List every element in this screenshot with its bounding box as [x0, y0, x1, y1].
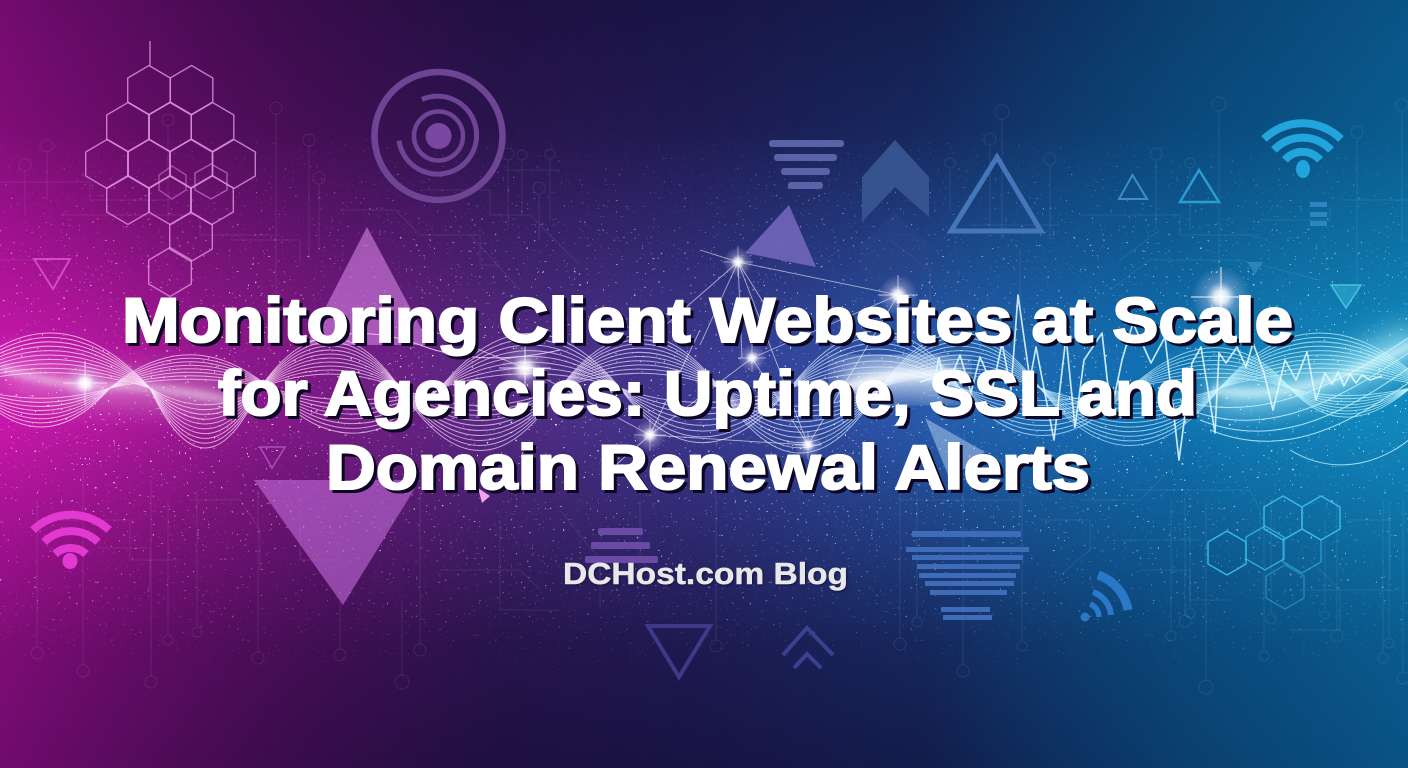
icon: cyan down triangle	[1331, 285, 1361, 308]
icon: pink marker	[478, 488, 490, 503]
icon: chevron arrows	[860, 140, 930, 300]
heartbeat line	[920, 295, 1382, 460]
icon: wifi top right	[1264, 123, 1341, 178]
glowing wave band	[0, 340, 1408, 398]
network constellation lines	[430, 250, 898, 470]
icon: pale triangle under title	[925, 418, 985, 480]
icon: large triangle outline	[951, 157, 1041, 231]
title: for Agencies: Uptime, SSL and	[218, 359, 1197, 429]
icon: faint down triangle	[1247, 262, 1263, 274]
subtitle: DCHost.com Blog	[563, 556, 848, 591]
icon: hexagon cluster bottom right	[1208, 496, 1340, 609]
icon: bottom triangle outline	[648, 626, 710, 677]
title: Domain Renewal Alerts	[326, 433, 1090, 503]
title	[122, 286, 1293, 503]
icon: centre stacked bars	[585, 528, 658, 563]
icon: large up triangle	[306, 227, 430, 345]
icon: small bars right	[1310, 202, 1327, 226]
bright wave core	[0, 340, 1408, 402]
icon: double chevron	[783, 628, 833, 668]
icon: wifi bottom left	[33, 515, 109, 569]
title: Monitoring Client Websites at Scale	[122, 286, 1293, 356]
speckled particles	[0, 128, 1408, 672]
icon: concentric target	[374, 72, 502, 200]
icon: tilted wifi	[1080, 575, 1128, 622]
glowing nodes	[63, 247, 1251, 459]
circuit board traces	[0, 97, 1408, 694]
wave mesh ribbons	[0, 330, 1408, 465]
icon: wide stacked bars	[906, 531, 1029, 620]
icon: filled violet triangle	[745, 205, 816, 267]
icon: hexagon cluster top left	[86, 41, 255, 296]
icon: small triangle outline one	[1119, 175, 1147, 199]
icon: stacked bars top	[769, 140, 844, 189]
icon: small down triangle	[260, 447, 285, 468]
icon: small triangle outline two	[1180, 170, 1219, 202]
icon: large down triangle	[254, 480, 420, 605]
icon: triangle outline left	[34, 259, 70, 289]
